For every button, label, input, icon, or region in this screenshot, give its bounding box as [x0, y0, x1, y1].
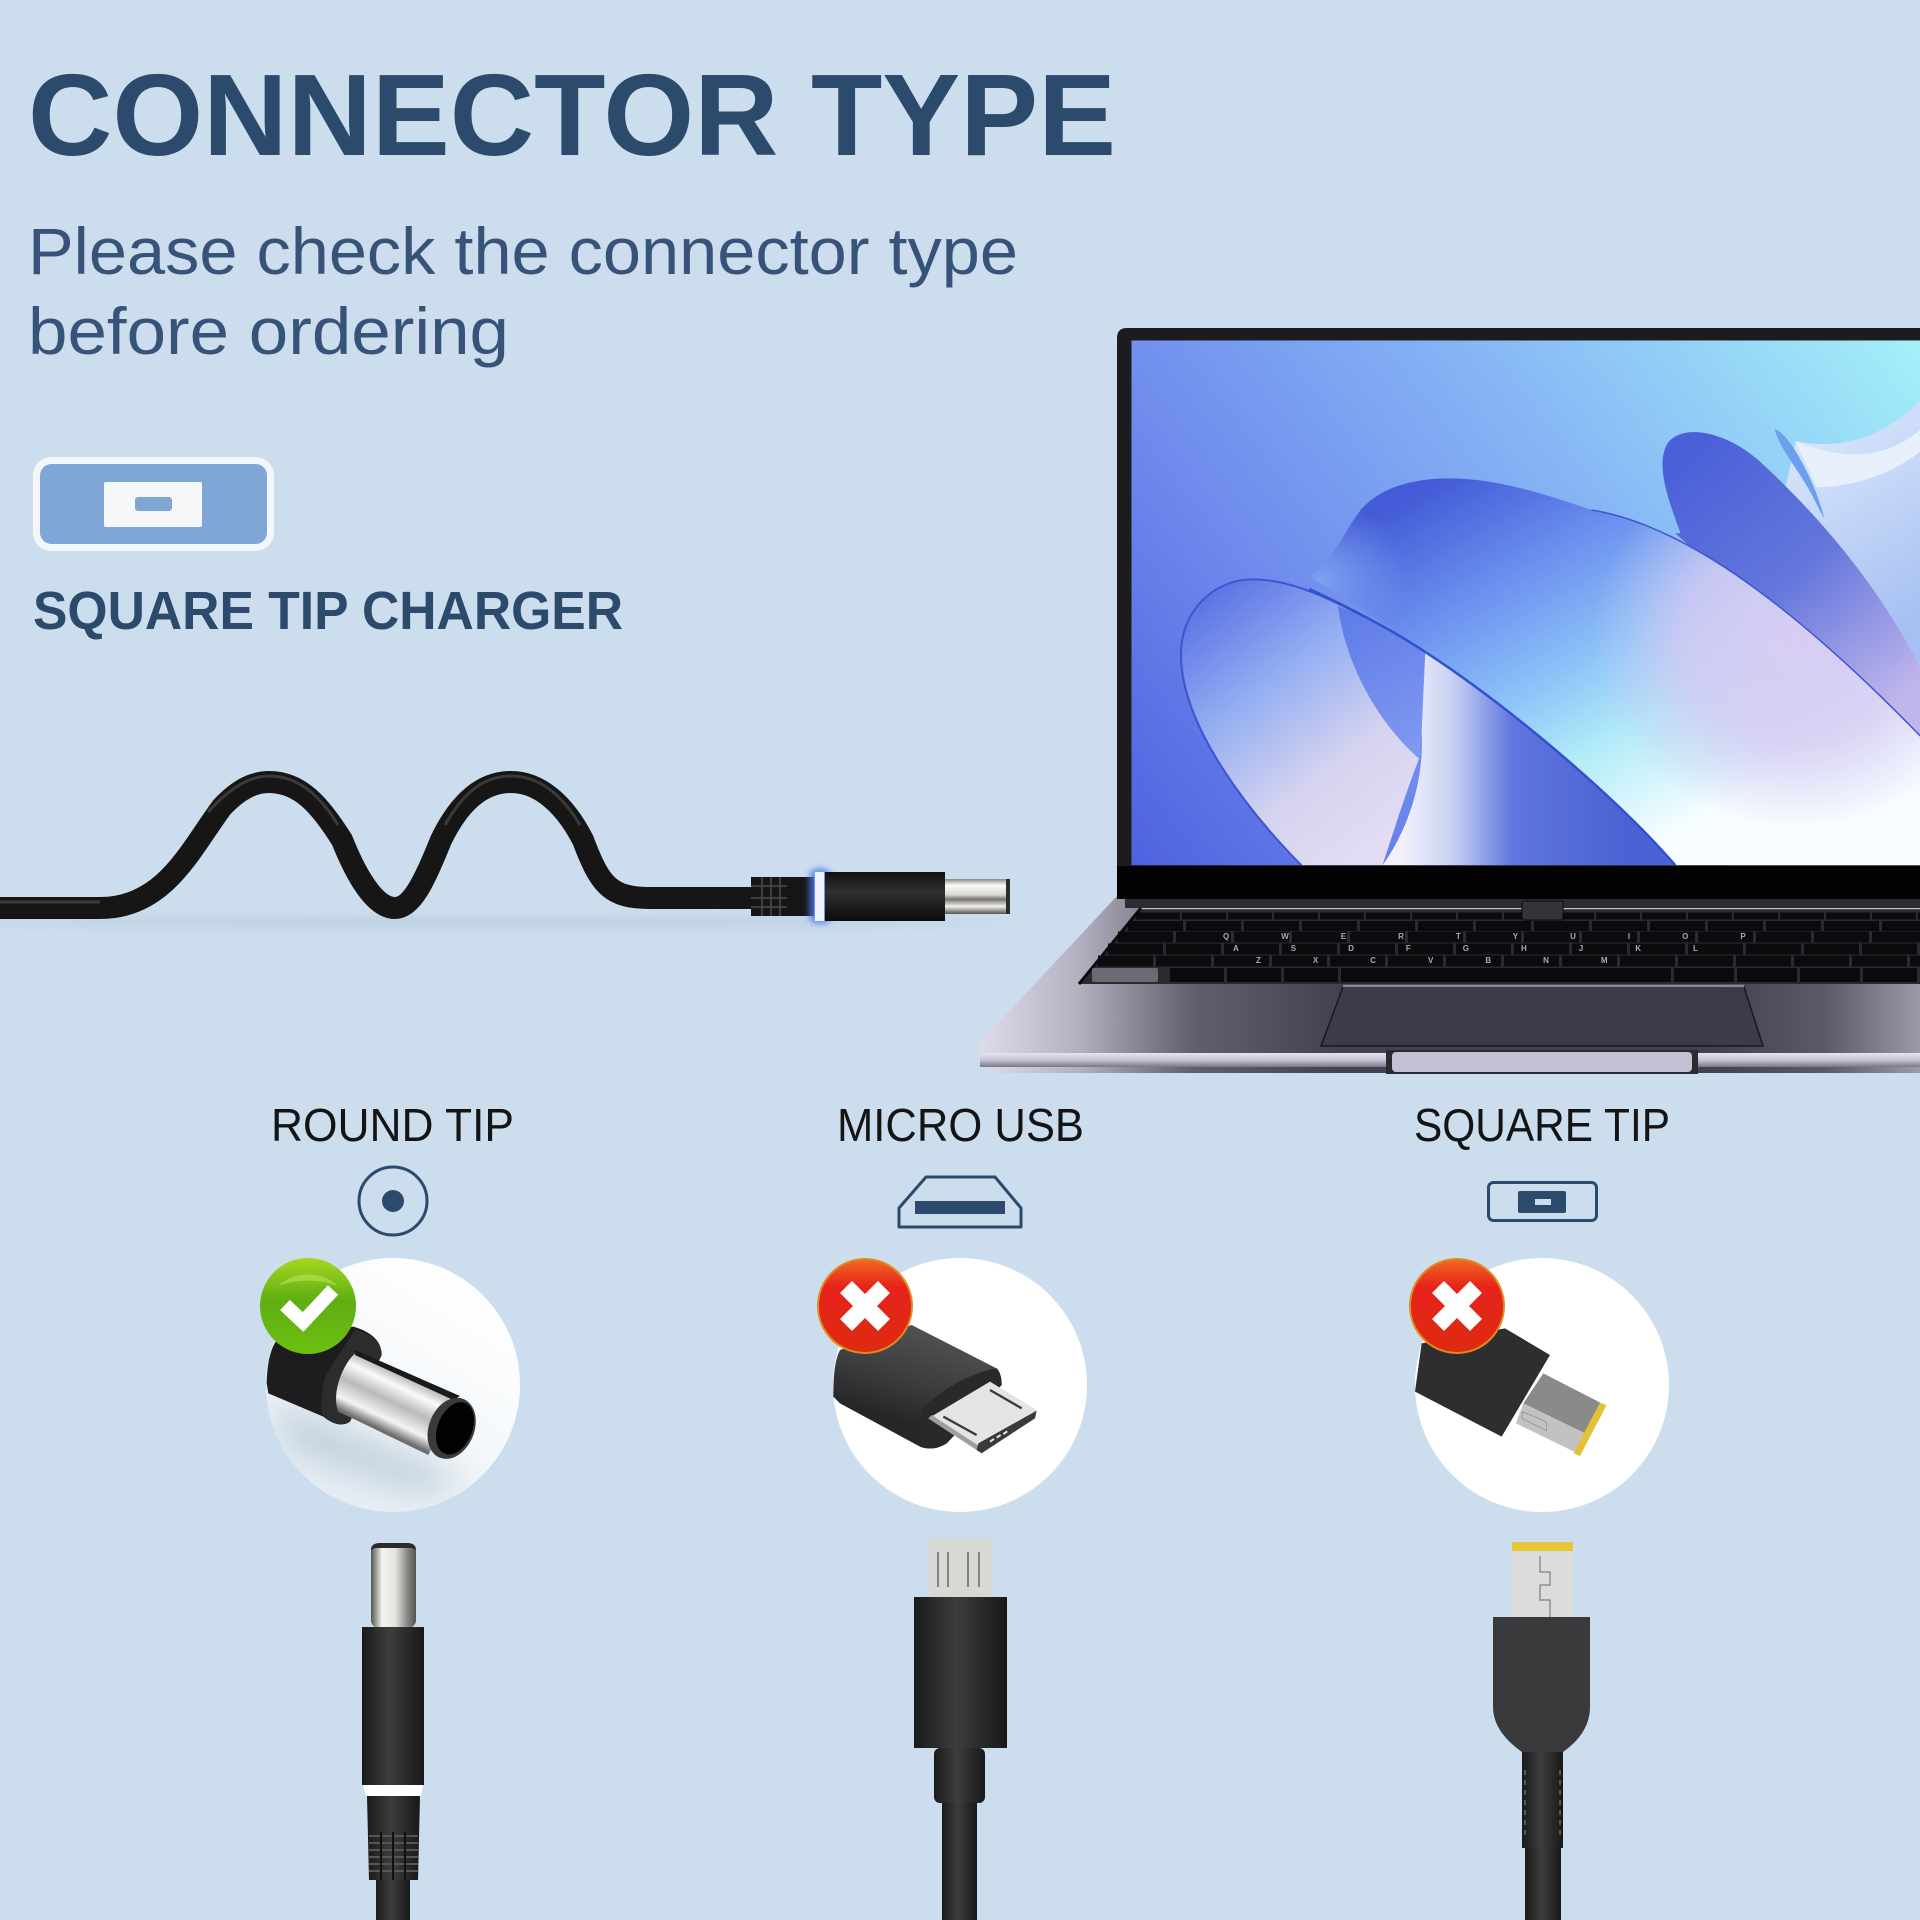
circle with square connector photo — [1415, 1258, 1669, 1512]
icon: round socket — [359, 1167, 427, 1235]
icon: square socket — [1488, 1182, 1596, 1220]
straight micro usb connector — [914, 1538, 1007, 1920]
subtitle: Please check the connector type — [28, 214, 1018, 288]
subtitle: before ordering — [28, 294, 509, 368]
heading: square tip charger: SQUARE TIP CHARGER — [33, 581, 623, 641]
icon: micro usb socket — [899, 1177, 1021, 1227]
label: square tip: SQUARE TIP — [1414, 1099, 1670, 1151]
laptop base — [977, 896, 1920, 1074]
connector tip — [945, 879, 1010, 914]
touchpad — [1321, 986, 1763, 1046]
laptop screen wallpaper — [1131, 340, 1920, 865]
circle with round connector photo — [266, 1258, 520, 1512]
cable with round connector — [0, 776, 1010, 925]
icon: red cross badge — [1410, 1259, 1504, 1353]
icon: red cross badge — [818, 1259, 912, 1353]
key legends: ASDFGHJKL — [1233, 944, 1750, 953]
label: micro usb: MICRO USB — [837, 1099, 1084, 1151]
blue glow ring — [809, 868, 831, 924]
icon: green check badge — [260, 1258, 356, 1354]
circle with micro usb photo — [833, 1258, 1087, 1512]
connector body — [825, 872, 945, 921]
label: round tip: ROUND TIP — [271, 1099, 514, 1151]
key legends: ZXCVBNM — [1256, 956, 1660, 965]
straight square connector — [1493, 1542, 1590, 1920]
hinge camera — [1522, 901, 1563, 920]
title: CONNECTOR TYPE — [28, 50, 1116, 180]
key legends: QWERTYUIOP — [1223, 932, 1798, 941]
subtitle — [28, 214, 1018, 368]
column: round tip — [260, 1099, 520, 1920]
column: micro usb — [818, 1099, 1087, 1920]
keyboard — [1079, 908, 1920, 984]
front lip — [980, 1050, 1920, 1074]
column: square tip — [1410, 1099, 1670, 1920]
straight round connector — [362, 1543, 424, 1920]
key legends — [1223, 932, 1798, 965]
laptop — [977, 328, 1920, 1074]
connector strain relief — [751, 877, 814, 916]
icon: square tip badge — [36, 460, 270, 548]
laptop lid — [1117, 328, 1920, 899]
